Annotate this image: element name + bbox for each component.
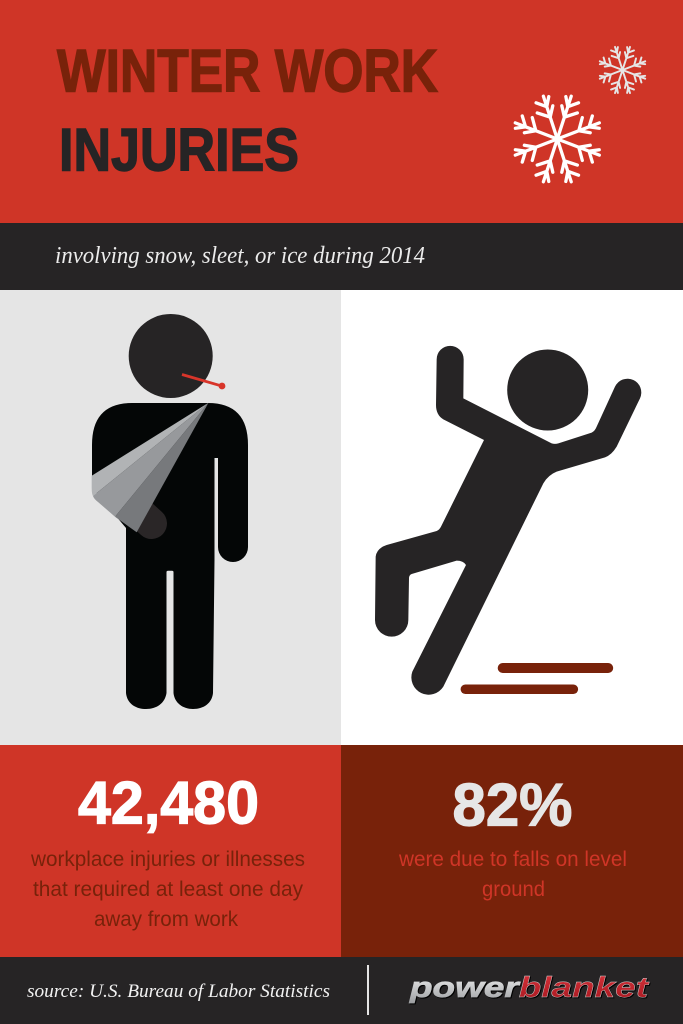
panel: falling worker: [341, 290, 683, 745]
description: that required at least one day: [33, 877, 303, 901]
description: were due to falls on level: [398, 847, 627, 871]
number: 42,480: [78, 770, 259, 836]
arm sling: [92, 403, 208, 532]
icon: slip mark upper: [498, 663, 613, 673]
head: [507, 350, 588, 430]
header panel: [0, 0, 683, 223]
logo: power blanket: [409, 972, 650, 1004]
subtitle text: involving snow, sleet, or ice during 2014: [55, 243, 425, 269]
footer band: [0, 957, 683, 1024]
panel: injuries stat: [0, 745, 341, 957]
icon: thermometer: [182, 374, 225, 389]
hand: [140, 513, 152, 524]
icon: slip mark lower: [461, 684, 578, 694]
description: ground: [482, 877, 545, 901]
description: workplace injuries or illnesses: [30, 847, 305, 871]
head: [129, 314, 213, 398]
icon: small snowflake: [599, 46, 646, 94]
panel: falls stat: [341, 745, 683, 957]
divider: [367, 965, 369, 1015]
subtitle band: [0, 223, 683, 290]
number: 82%: [452, 772, 572, 838]
falling body: [375, 346, 641, 695]
title line 1: WINTER WORK: [57, 38, 438, 104]
title line 2: INJURIES: [59, 116, 299, 184]
source: source: U.S. Bureau of Labor Statistics: [27, 981, 330, 1002]
panel: injured worker: [0, 290, 341, 745]
body: [92, 403, 248, 709]
icon: large snowflake: [513, 94, 601, 184]
description: away from work: [94, 907, 238, 931]
